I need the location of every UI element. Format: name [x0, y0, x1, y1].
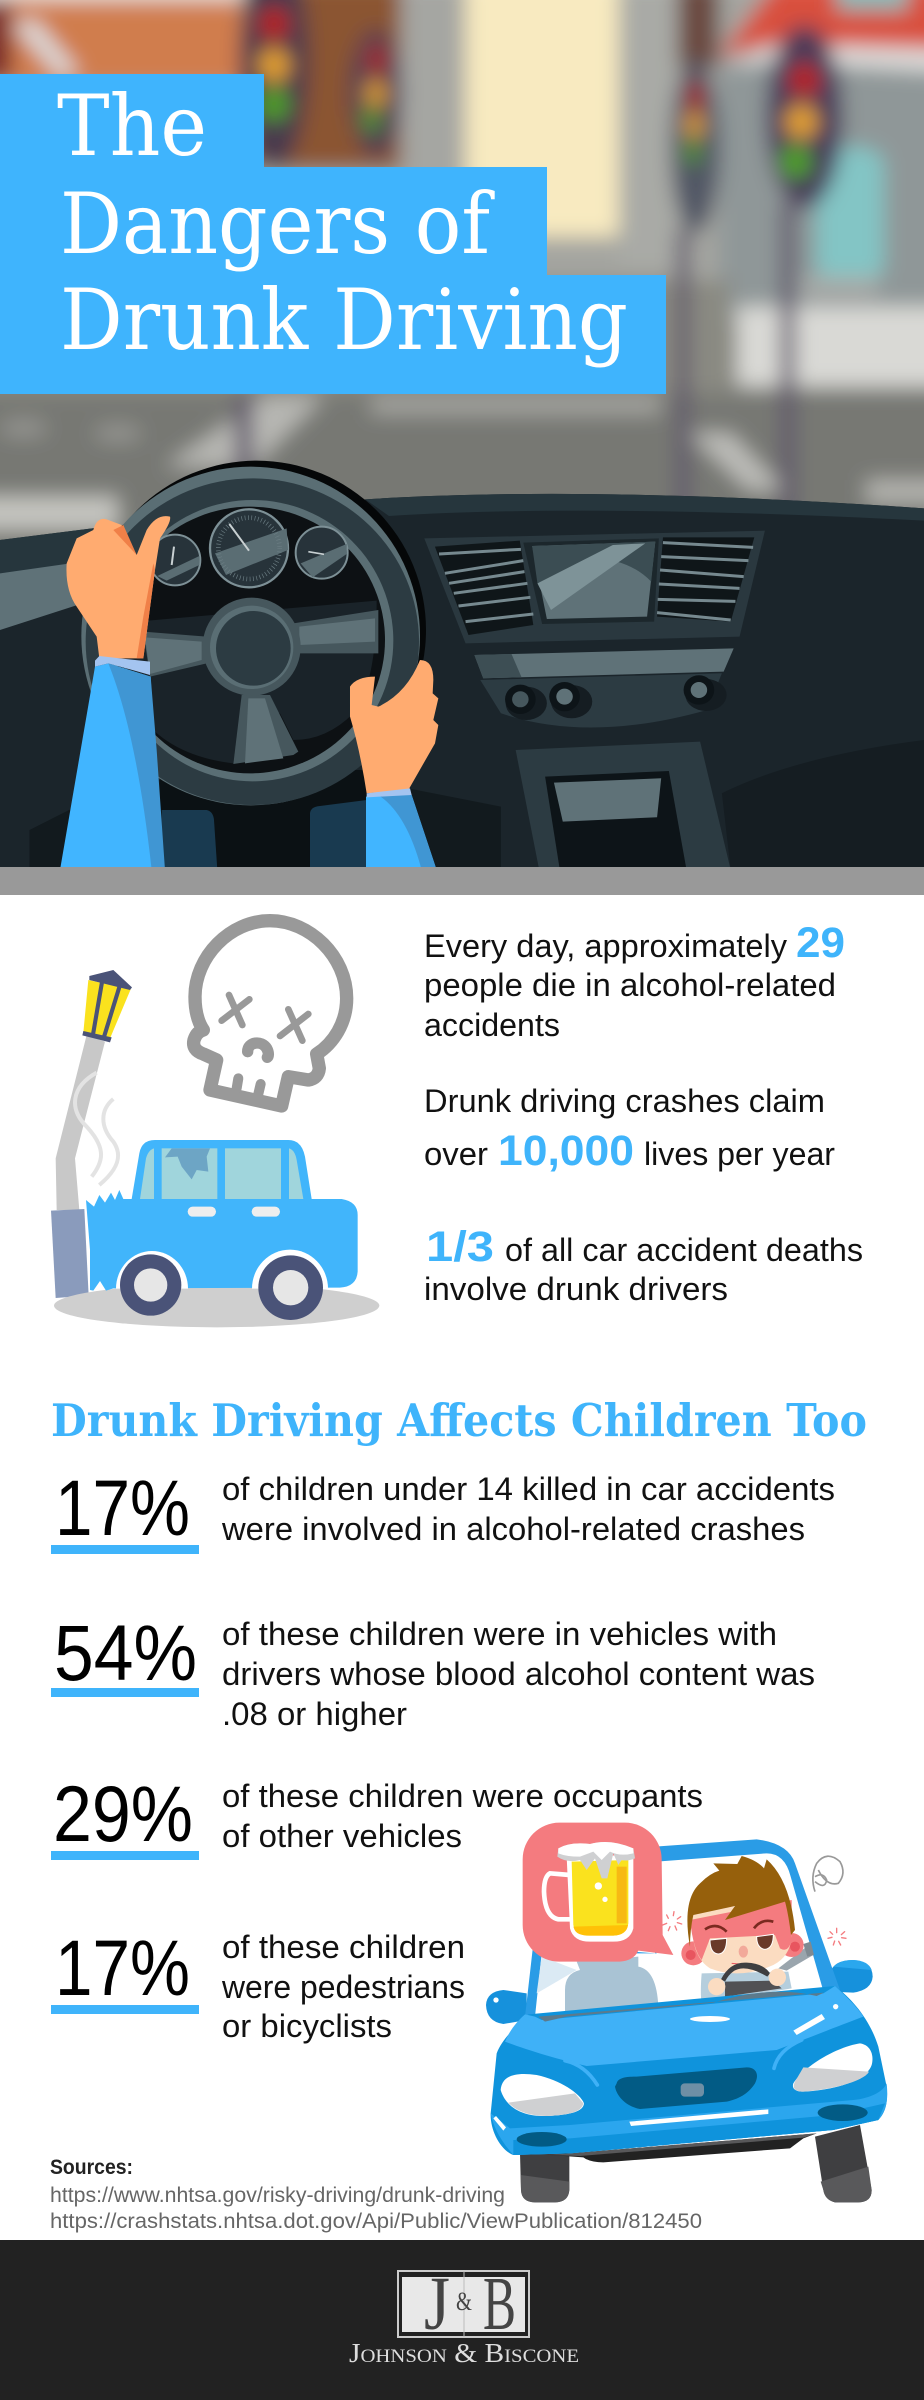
stat text: 29 deaths per day: people die in alcohol-related	[424, 967, 836, 1003]
right arm and hand	[350, 660, 438, 870]
stat row: 29%: of other vehicles	[222, 1818, 462, 1854]
footer band	[0, 2240, 924, 2400]
sources	[50, 2156, 702, 2233]
stat row: 17% under 14	[51, 1463, 835, 1554]
stat row: 54%: .08 or higher	[222, 1696, 407, 1732]
logo: firm name: Johnson & Biscone	[349, 2338, 579, 2368]
illustration: drunk driver in blue car	[486, 1823, 887, 2202]
stat row: 17% under 14: of children under 14 killed in car accidents	[222, 1471, 835, 1507]
logo: J&B mark	[398, 2262, 529, 2346]
stat row: 29%: of these children were occupants	[222, 1778, 703, 1814]
stat text: 10,000 lives per year	[424, 1083, 835, 1175]
stat row: 17% pedestrians: of these children	[222, 1929, 465, 1965]
stat row: 17% pedestrians: 17%	[55, 1923, 190, 2012]
stat row: 29%	[51, 1769, 703, 1860]
left arm and hand	[60, 516, 170, 870]
driver character	[681, 1856, 843, 2003]
passenger seat	[565, 1957, 658, 2015]
stat text: 10,000 lives per year: lives per year	[644, 1136, 835, 1172]
hero illustration: car interior and blurred street	[0, 0, 924, 870]
stat row: 17% pedestrians: or bicyclists	[222, 2008, 392, 2044]
centre console	[424, 531, 765, 870]
stat text: 10,000 lives per year: over	[424, 1136, 488, 1172]
gray band under hero	[0, 867, 924, 895]
stat text: 29 deaths per day: accidents	[424, 1007, 560, 1043]
stat row: 17% pedestrians: were pedestrians	[221, 1969, 465, 2005]
logo: J&B mark: J	[424, 2262, 450, 2346]
mirrors	[486, 1960, 873, 2024]
stat row: 17% under 14: 17%	[55, 1463, 190, 1552]
sources: https://crashstats.nhtsa.dot.gov/Api/Public/ViewPublication/812450	[50, 2210, 702, 2233]
sources: Sources:	[50, 2156, 133, 2179]
illustration: skull and crashed car	[51, 921, 379, 1327]
stat row: 54%: drivers whose blood alcohol content was	[222, 1656, 815, 1692]
blurred street background	[0, 0, 924, 540]
sources: https://www.nhtsa.gov/risky-driving/drunk-driving	[50, 2184, 505, 2207]
steering wheel	[81, 461, 426, 805]
stat text: 29 deaths per day: Every day, approximately	[424, 928, 787, 964]
section heading: Drunk Driving Affects Children Too	[51, 1394, 867, 1447]
stat text: one third of deaths: involve drunk drivers	[424, 1271, 728, 1307]
icon: bent street lamp	[51, 970, 132, 1298]
speech bubble with beer mug	[523, 1823, 673, 1962]
pedals and legs	[162, 800, 367, 870]
stat row: 17% under 14: were involved in alcohol-related crashes	[221, 1511, 805, 1547]
windshield frame and glass	[525, 1839, 840, 2017]
logo: J&B mark: &	[456, 2287, 472, 2316]
stat text: 29 deaths per day	[424, 919, 845, 1043]
title banner: Drunk Driving	[60, 271, 628, 369]
car body	[491, 1986, 887, 2155]
title banner: Dangers of	[60, 175, 495, 273]
stat row: 54%	[51, 1608, 815, 1732]
icon: skull	[194, 921, 347, 1106]
title banner	[0, 74, 666, 394]
instrument gauges	[150, 509, 348, 587]
car tires	[520, 2125, 872, 2202]
stat text: one third of deaths: 1/3	[426, 1223, 494, 1271]
steering wheel, arms and hands	[60, 461, 438, 870]
anger sparks	[663, 1912, 846, 1945]
stat row: 17% pedestrians	[51, 1923, 465, 2044]
stat text: one third of deaths: of all car accident deaths	[505, 1232, 863, 1268]
stat text: one third of deaths	[424, 1223, 863, 1307]
stat text: 29 deaths per day: 29	[796, 919, 845, 967]
logo: J&B mark: B	[483, 2262, 516, 2346]
stat row: 54%: of these children were in vehicles with	[222, 1616, 777, 1652]
stat row: 54%: 54%	[54, 1608, 197, 1697]
stat text: 10,000 lives per year: 10,000	[498, 1127, 634, 1175]
dashboard and console	[0, 494, 924, 870]
stat row: 29%: 29%	[53, 1769, 193, 1858]
stat text: 10,000 lives per year: Drunk driving crashes claim	[424, 1083, 825, 1119]
icon: crashed blue car	[86, 1140, 358, 1320]
ground shadow	[54, 1284, 379, 1327]
title banner: The	[57, 77, 207, 175]
